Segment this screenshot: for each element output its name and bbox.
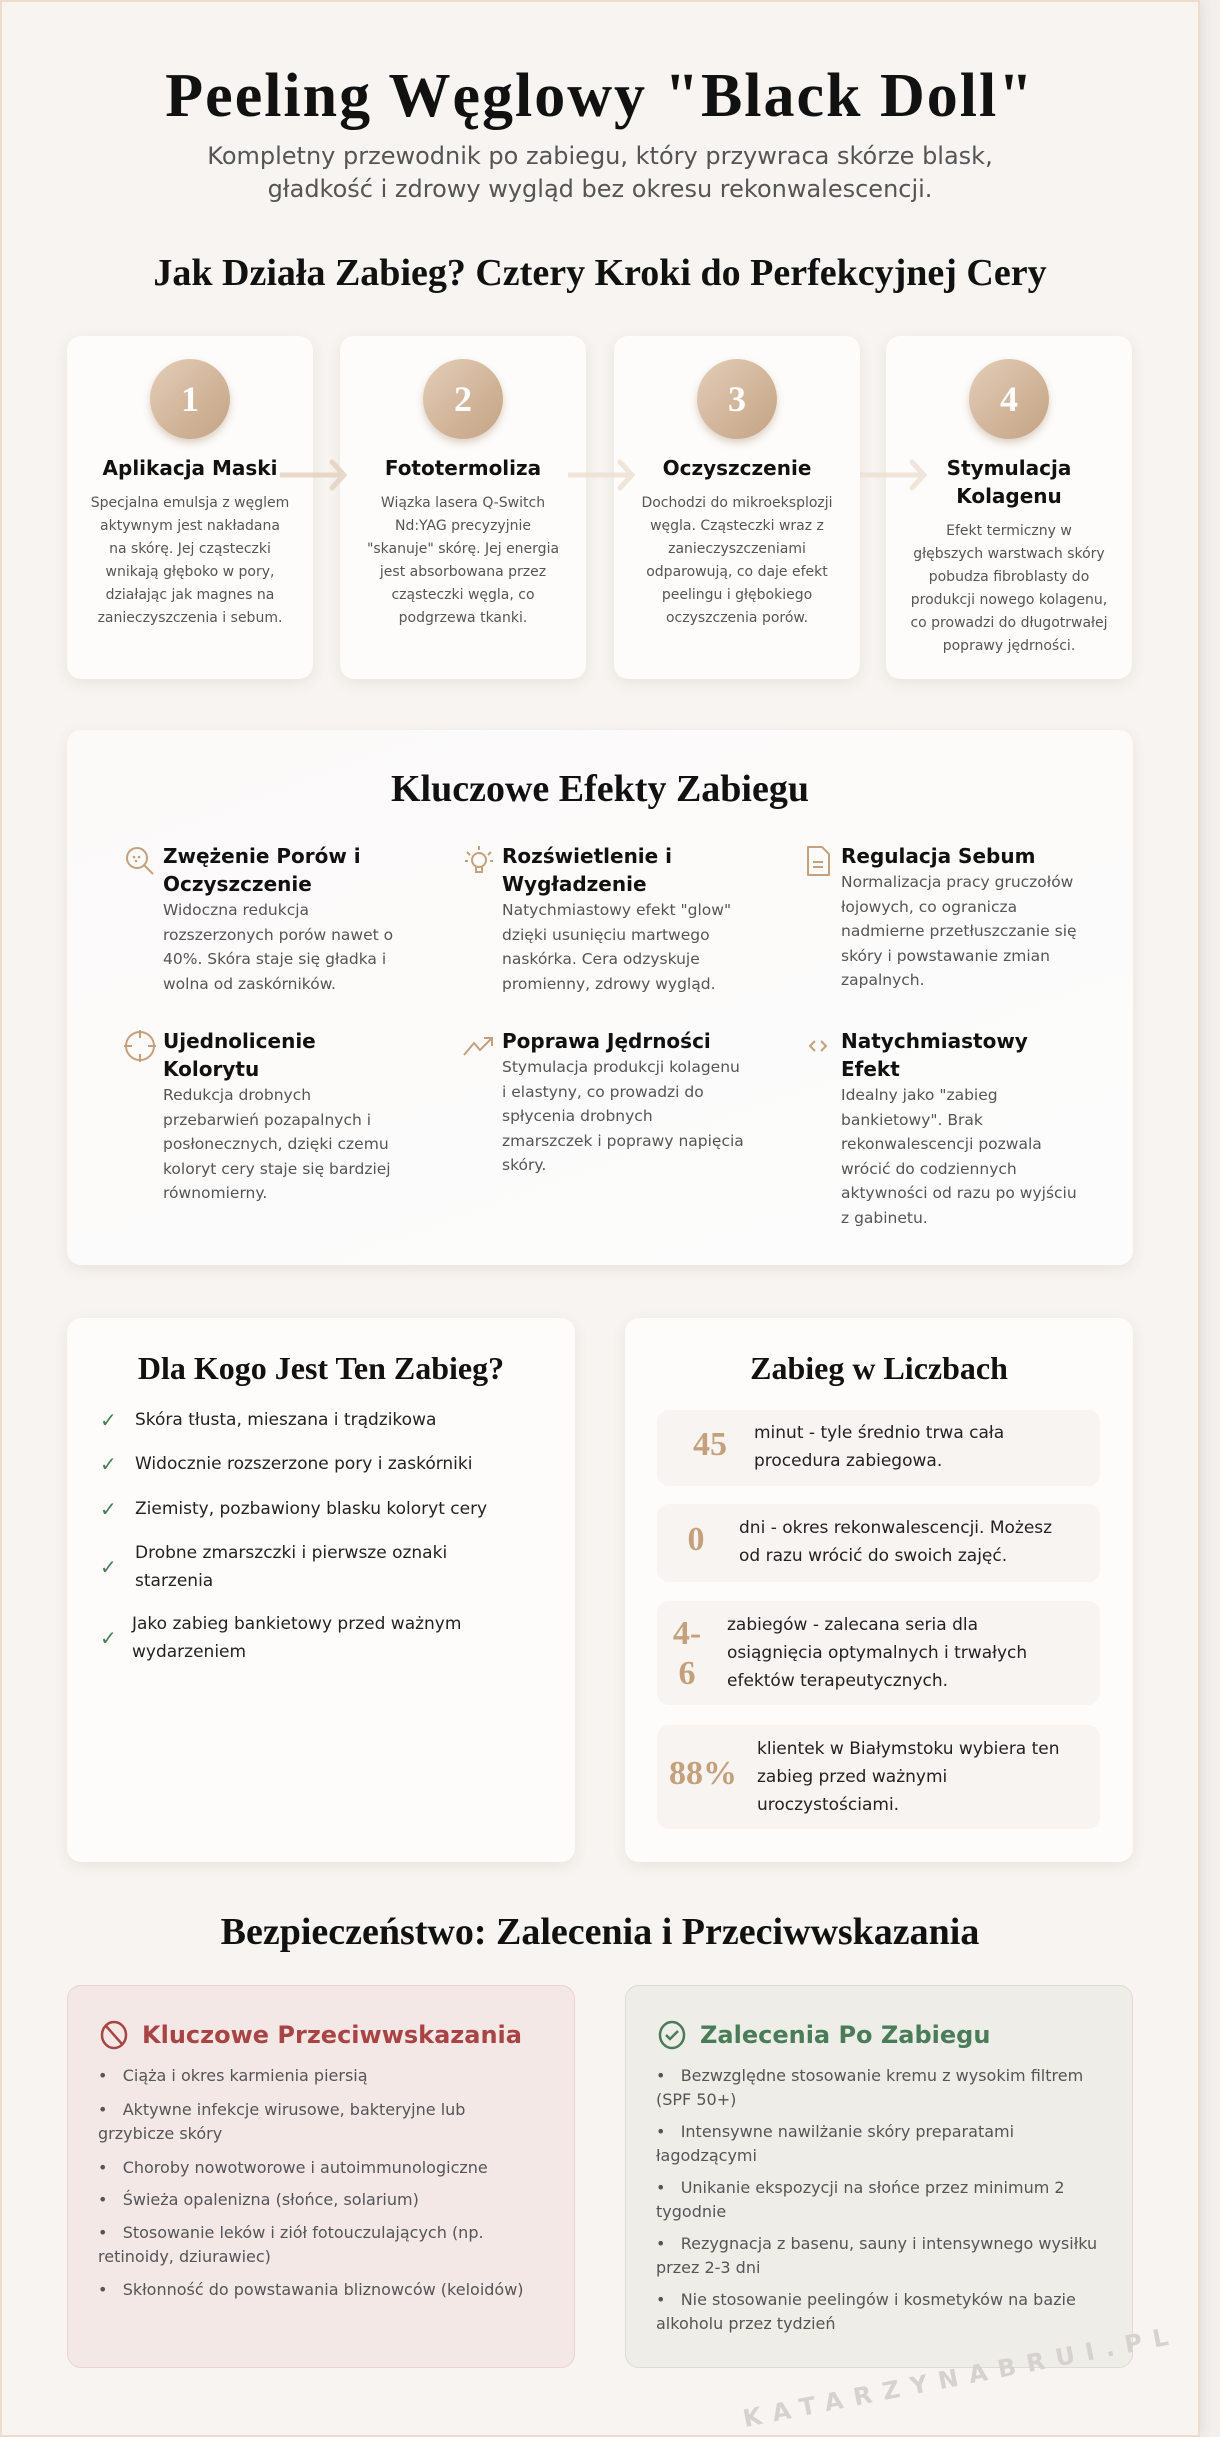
step text <box>91 495 289 626</box>
effect: tone: Redukcja drobnych <box>163 1086 311 1104</box>
list: • Ciąża i okres karmienia piersią <box>98 2066 368 2085</box>
step text: głębszych warstwach skóry <box>913 546 1105 562</box>
step text <box>641 495 833 626</box>
stat 4-6: osiągnięcia optymalnych i trwałych <box>727 1643 1027 1663</box>
checklist: Drobne zmarszczki i pierwsze oznaki starzenia <box>135 1543 447 1591</box>
subtitle <box>207 142 993 203</box>
effect: firmness: zmarszczek i poprawy napięcia <box>502 1132 744 1150</box>
step text: odparowują, co daje efekt <box>646 564 828 580</box>
heading: Zabieg w Liczbach <box>750 1350 1008 1386</box>
panel: aftercare: • Nie stosowanie peelingów i kosmetyków na bazie alkoholu przez tydzień <box>656 2290 1076 2333</box>
title: Peeling Węglowy "Black Doll" <box>165 62 1035 130</box>
step text: węgla. Cząsteczki wraz z <box>650 518 824 534</box>
step text: cząsteczki węgla, co <box>391 587 535 603</box>
subtitle: gładkość i zdrowy wygląd bez okresu rekonwalescencji. <box>268 175 932 203</box>
effect: tone: Kolorytu <box>163 1057 259 1081</box>
step number 2: 2 <box>454 379 472 419</box>
effect: sebum: skóry i powstawanie zmian <box>841 946 1050 964</box>
checklist: Ziemisty, pozbawiony blasku koloryt cery <box>135 1499 487 1519</box>
effect: firmness <box>463 1029 744 1174</box>
stat 88%: uroczystościami. <box>757 1795 899 1815</box>
step text: Nd:YAG precyzyjnie <box>395 518 531 534</box>
effect: pores: wolna od zaskórników. <box>163 974 336 992</box>
step text: zanieczyszczenia i sebum. <box>98 610 282 626</box>
effect: instant: z gabinetu. <box>841 1208 928 1226</box>
step title: Stymulacja <box>947 456 1071 480</box>
step title: Fototermoliza <box>385 456 541 480</box>
effect: pores: rozszerzonych porów nawet o <box>163 926 393 944</box>
icon: bulb <box>465 846 493 873</box>
stat 45 <box>657 1410 1100 1486</box>
effect: glow: Rozświetlenie i <box>502 844 672 868</box>
step card 3 <box>614 336 860 679</box>
step card 1 <box>67 336 313 679</box>
effect: firmness: skóry. <box>502 1156 546 1174</box>
effect: sebum: łojowych, co ogranicza <box>841 898 1017 916</box>
stat 88%: zabieg przed ważnymi <box>757 1767 947 1787</box>
list: • Bezwzględne stosowanie kremu z wysokim filtrem (SPF 50+) <box>656 2066 1083 2109</box>
panel: contraindications <box>67 1985 575 2368</box>
step text: Dochodzi do mikroeksplozji <box>641 495 833 511</box>
step number 3: 3 <box>728 379 746 419</box>
step title: Oczyszczenie <box>663 456 811 480</box>
effect: instant: Natychmiastowy <box>841 1029 1028 1053</box>
stat 0: dni - okres rekonwalescencji. Możesz <box>739 1518 1052 1538</box>
effect: instant: rekonwalescencji pozwala <box>841 1135 1042 1153</box>
effect: firmness: Poprawa Jędrności <box>502 1029 711 1053</box>
stat 0: 0 <box>688 1521 704 1558</box>
effect: firmness: spłycenia drobnych <box>502 1107 653 1125</box>
stat 45: 45 <box>693 1426 727 1463</box>
icon: magnifier <box>126 847 154 875</box>
stat 45: minut - tyle średnio trwa cała <box>754 1423 1004 1443</box>
effect: instant <box>808 1029 1077 1226</box>
icon: target <box>124 1030 156 1062</box>
effect: sebum: nadmierne przetłuszczanie się <box>841 922 1077 940</box>
step text: aktywnym jest nakładana <box>100 518 280 534</box>
step card 2 <box>340 336 586 679</box>
step text: peelingu i głębokiego <box>662 587 812 603</box>
panel: contraindications: • Stosowanie leków i ziół fotouczulających (np. retinoidy, dziurawiec) <box>98 2223 484 2266</box>
checklist: Skóra tłusta, mieszana i trądzikowa <box>135 1410 436 1430</box>
checklist: Widocznie rozszerzone pory i zaskórniki <box>135 1454 472 1474</box>
effect: instant: bankietowy". Brak <box>841 1110 983 1128</box>
panel: contraindications: • Aktywne infekcje wirusowe, bakteryjne lub grzybicze skóry <box>98 2100 465 2143</box>
icon: document <box>807 846 830 876</box>
step text: jest absorbowana przez <box>380 564 546 580</box>
step card 4 <box>886 336 1132 679</box>
step text: co prowadzi do długotrwałej <box>910 615 1108 631</box>
heading: safety: Bezpieczeństwo: Zalecenia i Przeciwwskazania <box>221 1911 979 1953</box>
arrow 3 <box>860 460 928 490</box>
effect: tone: posłonecznych, dzięki czemu <box>163 1135 389 1153</box>
stat 4-6 <box>657 1601 1100 1705</box>
checklist: ✓ <box>100 1408 117 1432</box>
stat 45: procedura zabiegowa. <box>754 1451 942 1471</box>
effect: glow: Natychmiastowy efekt "glow" <box>502 901 731 919</box>
step title: Kolagenu <box>956 484 1062 508</box>
icon: forbidden <box>100 2020 128 2050</box>
step text: "skanuje" skórę. Jej energia <box>367 541 559 557</box>
step text: działając jak magnes na <box>106 587 274 603</box>
icon: check circle <box>658 2020 686 2050</box>
effect: pores: 40%. Skóra staje się gładka i <box>163 950 386 968</box>
effect: tone <box>124 1029 391 1202</box>
step number 4 <box>969 359 1049 439</box>
icon: trend <box>463 1037 493 1056</box>
step text: oczyszczenia porów. <box>666 610 808 626</box>
stat 4-6: 6 <box>678 1655 696 1692</box>
step text <box>910 523 1108 654</box>
step title <box>947 456 1071 508</box>
effect: tone: równomierny. <box>163 1184 267 1202</box>
step text: wnikają głęboko w pory, <box>106 564 274 580</box>
stat 0 <box>657 1504 1100 1582</box>
icon: code <box>808 1040 828 1052</box>
panel: contraindications: • Choroby nowotworowe i autoimmunologiczne <box>98 2158 488 2177</box>
step number 1 <box>150 359 230 439</box>
arrow 2 <box>568 460 636 490</box>
panel: aftercare: • Intensywne nawilżanie skóry preparatami łagodzącymi <box>656 2122 1014 2165</box>
panel: numbers <box>625 1318 1133 1862</box>
stat 88% <box>657 1725 1100 1829</box>
effect: glow: promienny, zdrowy wygląd. <box>502 974 716 992</box>
panel: aftercare <box>625 1985 1133 2368</box>
stat 0: od razu wrócić do swoich zajęć. <box>739 1546 1007 1566</box>
stat 4-6: 4- <box>673 1615 701 1652</box>
panel: for whom <box>67 1318 575 1862</box>
stat 4-6: efektów terapeutycznych. <box>727 1671 948 1691</box>
stat 88%: klientek w Białymstoku wybiera ten <box>757 1739 1060 1759</box>
effect: glow: Wygładzenie <box>502 872 647 896</box>
effect: pores <box>126 844 393 992</box>
checklist: ✓ <box>100 1452 117 1476</box>
effect: instant: Efekt <box>841 1057 900 1081</box>
checklist: ✓ <box>100 1626 117 1650</box>
heading: Dla Kogo Jest Ten Zabieg? <box>138 1350 504 1386</box>
panel: aftercare: • Unikanie ekspozycji na słońce przez minimum 2 tygodnie <box>656 2178 1065 2221</box>
step number 1: 1 <box>181 379 199 419</box>
effect: sebum: Regulacja Sebum <box>841 844 1035 868</box>
step text: Specjalna emulsja z węglem <box>91 495 289 511</box>
effect: sebum: zapalnych. <box>841 971 925 989</box>
effect: instant: Idealny jako "zabieg <box>841 1086 998 1104</box>
effects heading: Kluczowe Efekty Zabiegu <box>391 768 809 810</box>
effect: glow: naskórka. Cera odzyskuje <box>502 950 700 968</box>
stat 4-6: zabiegów - zalecana seria dla <box>727 1615 978 1635</box>
panel: contraindications: • Świeża opalenizna (słońce, solarium) <box>98 2190 419 2209</box>
effect: firmness: Stymulacja produkcji kolagenu <box>502 1058 740 1076</box>
watermark: KATARZYNABRUI.PL <box>741 2321 1181 2433</box>
step text: zanieczyszczeniami <box>668 541 806 557</box>
title: Zalecenia Po Zabiegu <box>700 2021 990 2049</box>
checklist: Jako zabieg bankietowy przed ważnym wydarzeniem <box>132 1614 461 1662</box>
step text: podgrzewa tkanki. <box>399 610 527 626</box>
step text: pobudza fibroblasty do <box>929 569 1089 585</box>
effect: sebum <box>807 844 1077 989</box>
effect: tone: Ujednolicenie <box>163 1029 316 1053</box>
step number 2 <box>423 359 503 439</box>
effect: tone: koloryt cery staje się bardziej <box>163 1160 391 1178</box>
effect: pores: Oczyszczenie <box>163 872 312 896</box>
step title: Aplikacja Maski <box>103 456 277 480</box>
panel: key effects <box>67 730 1133 1265</box>
effect: tone: przebarwień pozapalnych i <box>163 1110 371 1128</box>
title: Kluczowe Przeciwwskazania <box>142 2021 522 2049</box>
effect: glow: dzięki usunięciu martwego <box>502 926 710 944</box>
effect: pores: Zwężenie Porów i <box>163 844 361 868</box>
checklist: ✓ <box>100 1497 117 1521</box>
arrow 1 <box>280 460 348 490</box>
effect: instant: aktywności od razu po wyjściu <box>841 1184 1077 1202</box>
step text: Efekt termiczny w <box>946 523 1072 539</box>
panel: contraindications: • Skłonność do powstawania bliznowców (keloidów) <box>98 2280 524 2299</box>
effect: sebum: Normalizacja pracy gruczołów <box>841 873 1073 891</box>
checklist <box>100 1408 487 1662</box>
subtitle: Kompletny przewodnik po zabiegu, który przywraca skórze blask, <box>207 142 993 170</box>
effect: pores: Widoczna redukcja <box>163 901 309 919</box>
step number 4: 4 <box>1000 379 1018 419</box>
step text: produkcji nowego kolagenu, <box>911 592 1107 608</box>
panel: aftercare: • Rezygnacja z basenu, sauny i intensywnego wysiłku przez 2-3 dni <box>656 2234 1097 2277</box>
checklist: ✓ <box>100 1555 117 1579</box>
step number 3 <box>697 359 777 439</box>
heading: steps: Jak Działa Zabieg? Cztery Kroki do Perfekcyjnej Cery <box>153 252 1047 294</box>
step text: na skórę. Jej cząsteczki <box>109 541 271 557</box>
step text: Wiązka lasera Q-Switch <box>381 495 545 511</box>
stat 88%: 88% <box>669 1755 737 1792</box>
effect: glow <box>465 844 731 992</box>
effect: firmness: i elastyny, co prowadzi do <box>502 1082 704 1100</box>
step text: poprawy jędrności. <box>943 638 1075 654</box>
step text <box>367 495 559 626</box>
effect: instant: wrócić do codziennych <box>841 1160 1017 1178</box>
